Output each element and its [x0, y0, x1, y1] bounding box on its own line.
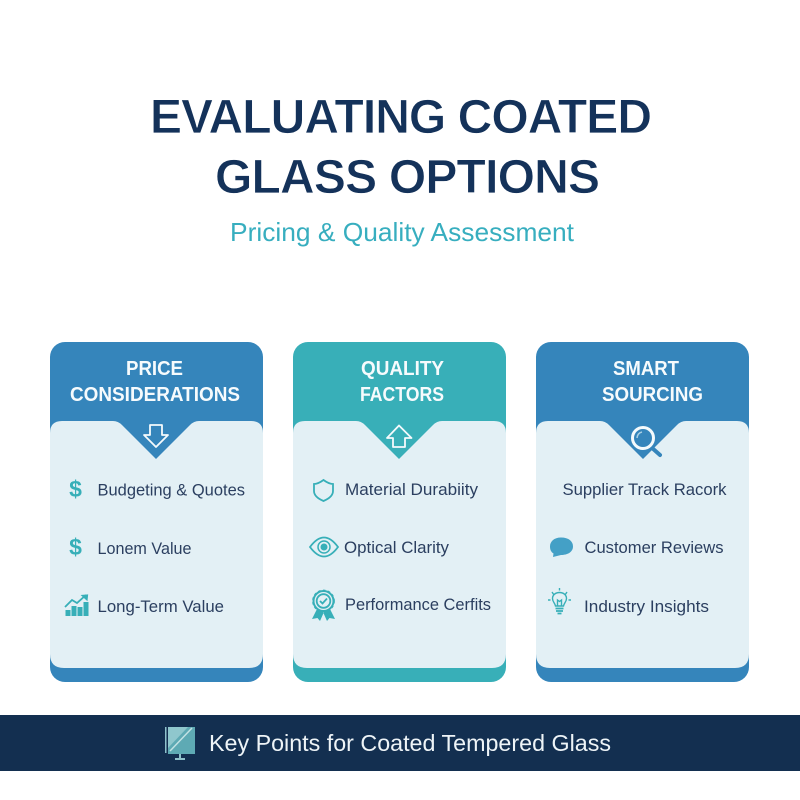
title: GLASS OPTIONS	[215, 151, 600, 204]
footer banner	[0, 715, 800, 771]
heading	[70, 358, 240, 406]
icon: growth chart	[65, 595, 88, 616]
card background	[293, 342, 506, 682]
footer text: Key Points for Coated Tempered Glass	[209, 730, 611, 756]
heading	[602, 358, 703, 406]
icon: magnifier	[632, 428, 660, 455]
title	[150, 91, 652, 204]
card body	[536, 421, 749, 668]
item: industry insights: Industry Insights	[584, 597, 709, 616]
heading: QUALITY	[361, 358, 445, 380]
heading	[360, 358, 445, 406]
item: customer reviews: Customer Reviews	[584, 538, 724, 557]
item: long-term value: Long-Term Value	[98, 597, 224, 616]
icon: eye	[310, 538, 338, 556]
item: optical clarity: Optical Clarity	[344, 538, 449, 557]
panel: quality factors	[293, 342, 506, 682]
item: lonem value: Lonem Value	[98, 539, 192, 558]
icon: dollar: $	[69, 476, 82, 502]
subtitle: Pricing & Quality Assessment	[230, 217, 575, 247]
title: EVALUATING COATED	[150, 91, 652, 144]
heading: SOURCING	[602, 384, 703, 406]
item: budgeting: Budgeting & Quotes	[98, 480, 245, 500]
icon: dollar: $	[69, 534, 82, 560]
icon: speech bubble	[550, 538, 573, 557]
item: performance certs: Performance Cerfits	[345, 595, 491, 614]
icon: down arrow	[144, 425, 168, 447]
icon: shield	[314, 480, 333, 501]
icon: award badge	[312, 590, 335, 621]
heading: FACTORS	[360, 384, 444, 406]
panel: smart sourcing	[536, 342, 749, 682]
icon: up arrow	[387, 426, 412, 447]
panel: price considerations	[50, 342, 263, 682]
icon: glass pane	[165, 727, 195, 759]
card background	[50, 342, 263, 682]
card background	[536, 342, 749, 682]
heading: CONSIDERATIONS	[70, 384, 240, 406]
heading: SMART	[613, 358, 679, 380]
heading: PRICE	[126, 358, 183, 380]
icon: lightbulb	[548, 588, 571, 614]
item: supplier track record: Supplier Track Racork	[562, 480, 727, 499]
card body	[293, 421, 506, 668]
item: material durability: Material Durabiity	[345, 480, 479, 499]
card body	[50, 421, 263, 668]
